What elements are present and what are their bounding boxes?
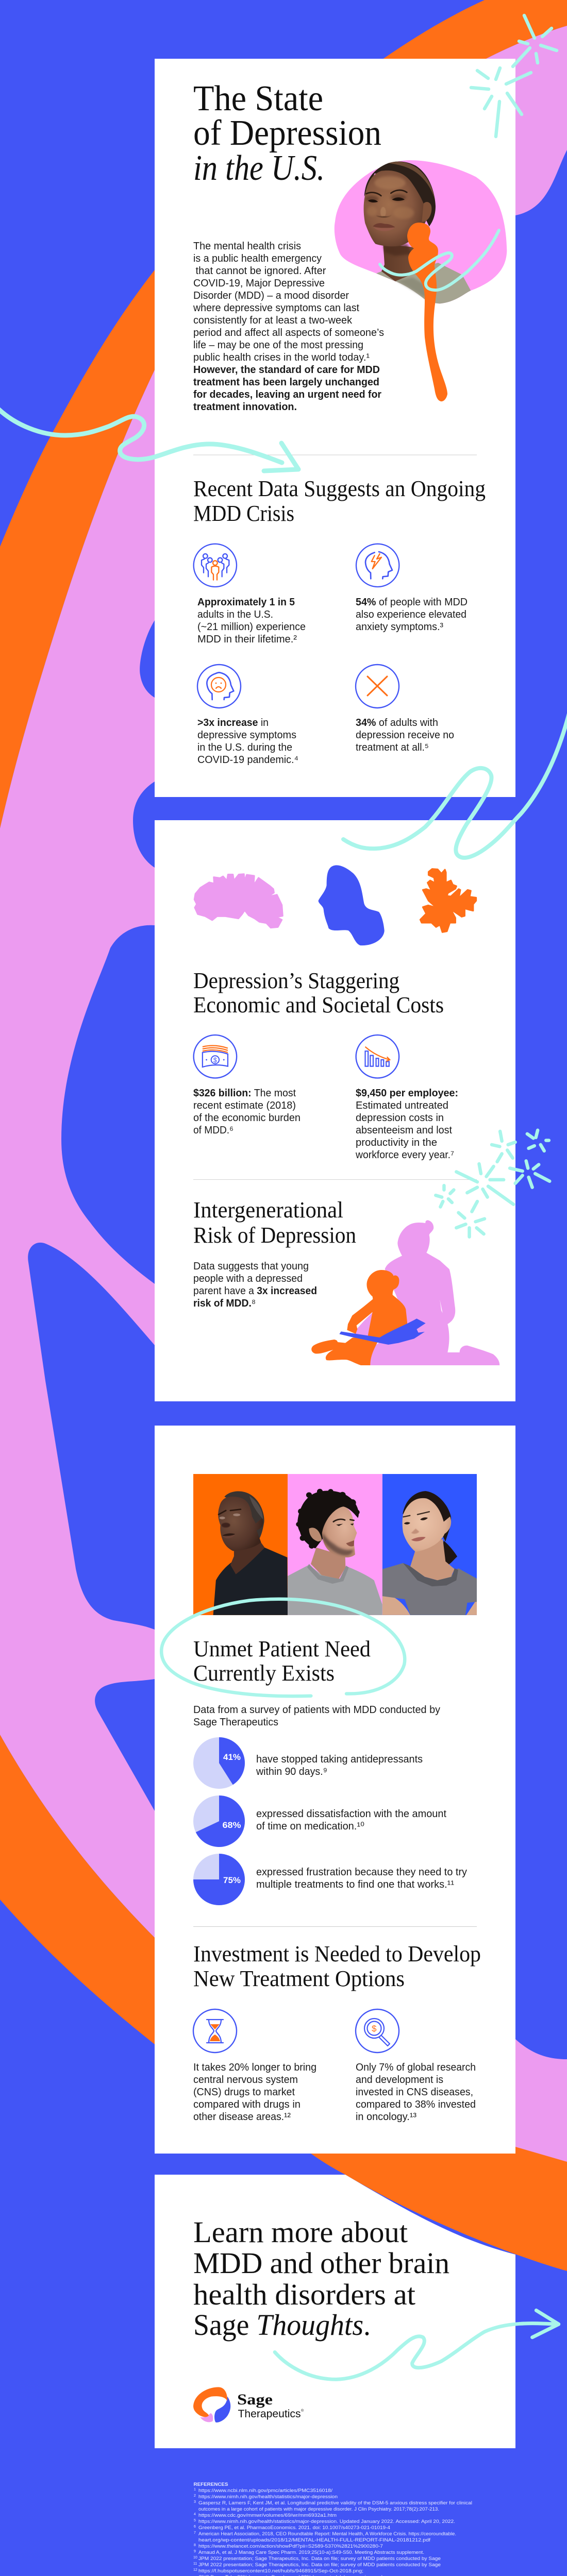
references list: 1 <box>194 2488 196 2492</box>
references list: JPM 2022 presentation; Sage Therapeutics, Inc. Data on file; survey of MDD patients conducted by Sage <box>198 2562 441 2568</box>
heading: recent data: MDD Crisis <box>193 501 294 526</box>
references list: REFERENCES <box>194 2482 228 2487</box>
text: stopped antidepressants: have stopped taking antidepressants <box>256 1754 423 1765</box>
intro paragraph: The mental health crisis <box>193 241 301 252</box>
heading: investment needed: New Treatment Options <box>193 1966 405 1991</box>
pie chart: 75 percent: 75% <box>223 1876 241 1885</box>
title <box>193 79 381 188</box>
stat: 3x increase: depressive symptoms <box>197 730 296 741</box>
references list: 4 <box>194 2513 196 2516</box>
stat: 1 in 5 adults: Approximately 1 in 5 <box>197 597 295 608</box>
heading: learn more: MDD and other brain <box>193 2246 449 2280</box>
heading: learn more <box>193 2215 449 2342</box>
stat: 20 percent longer: other disease areas.¹² <box>193 2111 291 2123</box>
background: blue large blob left <box>61 925 155 1284</box>
stat: 1 in 5 adults: adults in the U.S. <box>197 609 273 620</box>
references list: 5 <box>194 2519 196 2522</box>
text: frustration <box>256 1867 467 1890</box>
stat: 326 billion: of the economic burden <box>193 1112 301 1124</box>
photo: woman in pink blob <box>335 160 507 303</box>
background: pink blob lower right <box>515 2039 567 2164</box>
intro paragraph: life – may be one of the most pressing <box>193 340 363 351</box>
text: stopped antidepressants: within 90 days.⁹ <box>256 1766 327 1777</box>
panel: unmet need card <box>155 1426 515 2154</box>
illustration: pink brain <box>194 874 282 928</box>
text: risk paragraph <box>193 1261 317 1309</box>
references list: 10 <box>193 2556 197 2560</box>
background: blue flowing blob lower left <box>28 1243 155 1630</box>
background: blue bulge one <box>140 620 155 698</box>
stat: 54 percent anxiety: also experience elevated <box>356 609 466 620</box>
text: survey intro: Data from a survey of patients with MDD conducted by <box>193 1704 440 1716</box>
text: dissatisfaction: of time on medication.¹⁰ <box>256 1821 364 1832</box>
references list: American Heart Association, 2018, CEO Roundtable Report: Mental Health, A Workforce Crisis. https://ceoroundtable. <box>198 2531 456 2537</box>
icon: magnifier with dollar <box>356 2009 399 2053</box>
stat: 1 in 5 adults <box>197 597 306 645</box>
pie chart: 68 percent: 68% <box>223 1821 241 1830</box>
stat: 1 in 5 adults: MDD in their lifetime.² <box>197 634 297 645</box>
icon: falling bar chart <box>356 1035 399 1078</box>
intro paragraph: consistently for at least a two-week <box>193 315 353 326</box>
stat: 9450 per employee: productivity in the <box>356 1137 437 1148</box>
references list: https://www.cdc.gov/mmwr/volumes/69/wr/mm6932a1.htm <box>198 2513 337 2518</box>
stat: 3x increase: in the U.S. during the <box>197 742 292 753</box>
pie chart: 41 percent: 41% <box>223 1753 241 1762</box>
heading: recent data <box>193 476 486 526</box>
text: risk paragraph: parent have a 3x increased <box>193 1285 317 1297</box>
heading: learn more: Sage Thoughts. <box>193 2308 371 2342</box>
stat: 326 billion: recent estimate (2018) <box>193 1100 296 1111</box>
references list: JPM 2022 presentation; Sage Therapeutics, Inc. Data on file; survey of MDD patients conducted by Sage <box>198 2556 441 2562</box>
stat: 20 percent longer: compared with drugs in <box>193 2099 301 2110</box>
references list: 12 <box>193 2568 197 2572</box>
references list: 3 <box>194 2500 196 2504</box>
icon: head with sad face <box>197 665 241 708</box>
panel: costs and risk card <box>155 820 515 1401</box>
references list <box>193 2482 472 2576</box>
heading: learn more: health disorders at <box>193 2278 415 2311</box>
intro paragraph <box>193 241 384 413</box>
text: survey intro: Sage Therapeutics <box>193 1717 278 1728</box>
stat: 3x increase <box>197 717 298 766</box>
stat: 7 percent of research: in oncology.¹³ <box>356 2111 416 2123</box>
mint arrow to right <box>275 2310 559 2379</box>
stat: 20 percent longer: (CNS) drugs to market <box>193 2087 295 2098</box>
portrait: woman on blue <box>382 1474 477 1615</box>
heading: unmet patient need: Currently Exists <box>193 1660 335 1686</box>
heading: intergenerational risk <box>193 1197 356 1248</box>
heading: investment needed <box>193 1941 481 1991</box>
title: of Depression <box>193 113 381 153</box>
heading: unmet patient need <box>193 1636 371 1686</box>
mint loop and arc between cards <box>343 701 567 858</box>
portrait: man on pink <box>288 1474 382 1615</box>
references list: Greenberg PE, et al. PharmacoEconomics. 2021. doi: 10.1007/s40273-021-01019-4 <box>198 2525 391 2531</box>
text: risk paragraph: risk of MDD.⁸ <box>193 1298 256 1309</box>
stat: 326 billion: $326 billion: The most <box>193 1088 296 1099</box>
references list: 7 <box>194 2531 196 2535</box>
stat: 9450 per employee: depression costs in <box>356 1112 444 1124</box>
text: risk paragraph: people with a depressed <box>193 1273 303 1284</box>
heading: learn more: Learn more about <box>193 2215 408 2249</box>
decorative orange squiggle stem <box>407 223 447 401</box>
background: orange sweeping band bottom <box>0 1735 567 2271</box>
references list: heart.org/wp-content/uploads/2018/12/MENTAL-HEALTH-FULL-REPORT-FINAL-20181212.pdf <box>198 2537 430 2543</box>
intro paragraph: period and affect all aspects of someone’s <box>193 327 384 338</box>
heading: unmet patient need: Unmet Patient Need <box>193 1636 371 1662</box>
references list: https://f.hubspotusercontent10.net/hubfs/9468915/Sep-Oct-2018.png; <box>198 2568 363 2574</box>
pie chart: 41 percent <box>193 1737 245 1789</box>
illustration: mother and child reading <box>311 1220 499 1365</box>
stat: 9450 per employee <box>355 1088 458 1161</box>
mint ellipse around heading <box>161 1599 405 1696</box>
intro paragraph: public health crises in the world today.¹ <box>193 352 370 363</box>
intro paragraph: treatment has been largely unchanged <box>193 377 379 388</box>
intro paragraph: COVID-19, Major Depressive <box>193 278 325 289</box>
references list: 11 <box>193 2562 197 2566</box>
stat: 1 in 5 adults: (~21 million) experience <box>197 621 306 633</box>
icon: group of people <box>194 544 237 587</box>
pie chart: 68 percent <box>193 1795 245 1847</box>
stat: 34 percent no treatment: 34% of adults with <box>356 717 438 728</box>
text: dissatisfaction: expressed dissatisfaction with the amount <box>256 1808 446 1820</box>
intro paragraph: that cannot be ignored. After <box>196 265 326 277</box>
stat: 54 percent anxiety: anxiety symptoms.³ <box>356 621 443 633</box>
stat: 34 percent no treatment: treatment at all.⁵ <box>356 742 429 753</box>
stat: 326 billion <box>193 1088 301 1136</box>
stat: 20 percent longer: central nervous system <box>193 2074 298 2086</box>
background: blue bulge two <box>133 782 155 868</box>
references list: https://www.thelancet.com/action/showPdf?pii=S2589-5370%2821%2900280-7 <box>198 2544 383 2549</box>
title: in the U.S. <box>193 148 325 188</box>
photo strip: three portraits <box>193 1474 477 1615</box>
stat: 7 percent of research <box>356 2062 476 2123</box>
references list: https://www.nimh.nih.gov/health/statistics/major-depression <box>198 2494 338 2500</box>
heading: staggering costs: Economic and Societal Costs <box>193 992 444 1018</box>
background: blue notch blob <box>95 1679 155 1811</box>
heading: staggering costs: Depression’s Staggering <box>193 968 399 993</box>
references list: outcomes in a large cohort of patients with major depressive disorder. J Clin Psychiatry. 2017;78(2):207-213. <box>198 2506 439 2512</box>
heading: investment needed: Investment is Needed to Develop <box>193 1941 481 1967</box>
stat: 7 percent of research: invested in CNS diseases, <box>356 2087 473 2098</box>
icon: dollar bill: $ <box>213 1057 217 1064</box>
mint squiggle over portrait <box>380 230 499 290</box>
stat: 3x increase: >3x increase in <box>197 717 269 728</box>
text: stopped antidepressants <box>256 1754 423 1777</box>
background: pink area left <box>0 370 155 1938</box>
references list: 6 <box>194 2525 196 2529</box>
logo: Sage Therapeutics <box>193 2387 304 2422</box>
pie chart: 75 percent <box>193 1854 245 1905</box>
heading: staggering costs <box>193 968 444 1018</box>
mint sparkles cluster right <box>436 1130 549 1237</box>
illustration: blue head profile <box>319 865 385 945</box>
references list: Gaspersz R, Lamers F, Kent JM, et al. Longitudinal predictive validity of the DSM-5 anxious distress specifier for clinical <box>198 2500 472 2506</box>
stat: 54 percent anxiety <box>356 597 468 633</box>
references list: Arnaud A, et al. J Manag Care Spec Pharm. 2019;25(10-a):S49-S50. Meeting Abstracts supplement. <box>198 2550 424 2555</box>
background: pink blob top right <box>486 26 567 215</box>
stat: 7 percent of research: and development is <box>356 2074 443 2086</box>
stat: 20 percent longer: It takes 20% longer to bring <box>193 2062 316 2073</box>
stat: 9450 per employee: Estimated untreated <box>356 1100 448 1111</box>
mint arrow swoosh left into card <box>0 409 298 471</box>
portrait: man on orange <box>193 1474 288 1615</box>
logo: Sage Therapeutics: Sage <box>237 2391 273 2408</box>
stat: 7 percent of research: Only 7% of global research <box>356 2062 476 2073</box>
intro paragraph: treatment innovation. <box>193 401 297 413</box>
stat: 9450 per employee: workforce every year.⁷ <box>355 1149 454 1161</box>
text: frustration: multiple treatments to find one that works.¹¹ <box>256 1879 454 1890</box>
stat: 9450 per employee: absenteeism and lost <box>356 1125 452 1136</box>
mint sparkles top right <box>471 15 557 137</box>
references list: https://www.nimh.nih.gov/health/statistics/major-depression. Updated January 2022. Accessed: April 20, 2022. <box>198 2519 455 2524</box>
text: survey intro <box>193 1704 440 1728</box>
stat: 3x increase: COVID-19 pandemic.⁴ <box>197 754 298 766</box>
title: The State <box>193 79 323 118</box>
icon: head with lightning bolt <box>356 544 399 587</box>
stat: 7 percent of research: compared to 38% invested <box>356 2099 476 2110</box>
icon: magnifier with dollar: $ <box>372 2024 377 2033</box>
heading: intergenerational risk: Risk of Depression <box>193 1223 356 1248</box>
logo: Sage Therapeutics: ® <box>301 2409 304 2413</box>
references list: 2 <box>194 2494 196 2498</box>
stat: 34 percent no treatment: depression receive no <box>356 730 454 741</box>
illustration: orange leaf <box>420 869 476 932</box>
panel: intro and crisis card <box>155 59 515 797</box>
stat: 326 billion: of MDD.⁶ <box>193 1125 234 1136</box>
logo: Sage Therapeutics: Therapeutics <box>238 2408 301 2420</box>
icon: orange X <box>356 665 399 708</box>
references list: 8 <box>194 2544 196 2547</box>
panel: learn more card <box>155 2175 515 2448</box>
intro paragraph: is a public health emergency <box>193 253 322 264</box>
heading: recent data: Recent Data Suggests an Ongoing <box>193 476 486 501</box>
stat: 34 percent no treatment <box>356 717 454 753</box>
intro paragraph: for decades, leaving an urgent need for <box>193 389 381 400</box>
stat: 54 percent anxiety: 54% of people with MDD <box>356 597 468 608</box>
background: orange sweeping band top <box>0 0 567 828</box>
stat: 9450 per employee: $9,450 per employee: <box>356 1088 458 1099</box>
stat: 20 percent longer <box>193 2062 316 2123</box>
intro paragraph: Disorder (MDD) – a mood disorder <box>193 290 349 301</box>
text: dissatisfaction <box>256 1808 446 1832</box>
intro paragraph: where depressive symptoms can last <box>193 302 359 314</box>
references list: 9 <box>194 2550 196 2553</box>
icon: dollar bill <box>194 1035 237 1078</box>
references list: https://www.ncbi.nlm.nih.gov/pmc/articles/PMC3516018/ <box>198 2488 332 2494</box>
heading: intergenerational risk: Intergenerational <box>193 1197 343 1223</box>
intro paragraph: However, the standard of care for MDD <box>193 364 380 376</box>
icon: hourglass <box>193 2009 237 2053</box>
text: frustration: expressed frustration because they need to try <box>256 1867 467 1878</box>
text: risk paragraph: Data suggests that young <box>193 1261 309 1272</box>
